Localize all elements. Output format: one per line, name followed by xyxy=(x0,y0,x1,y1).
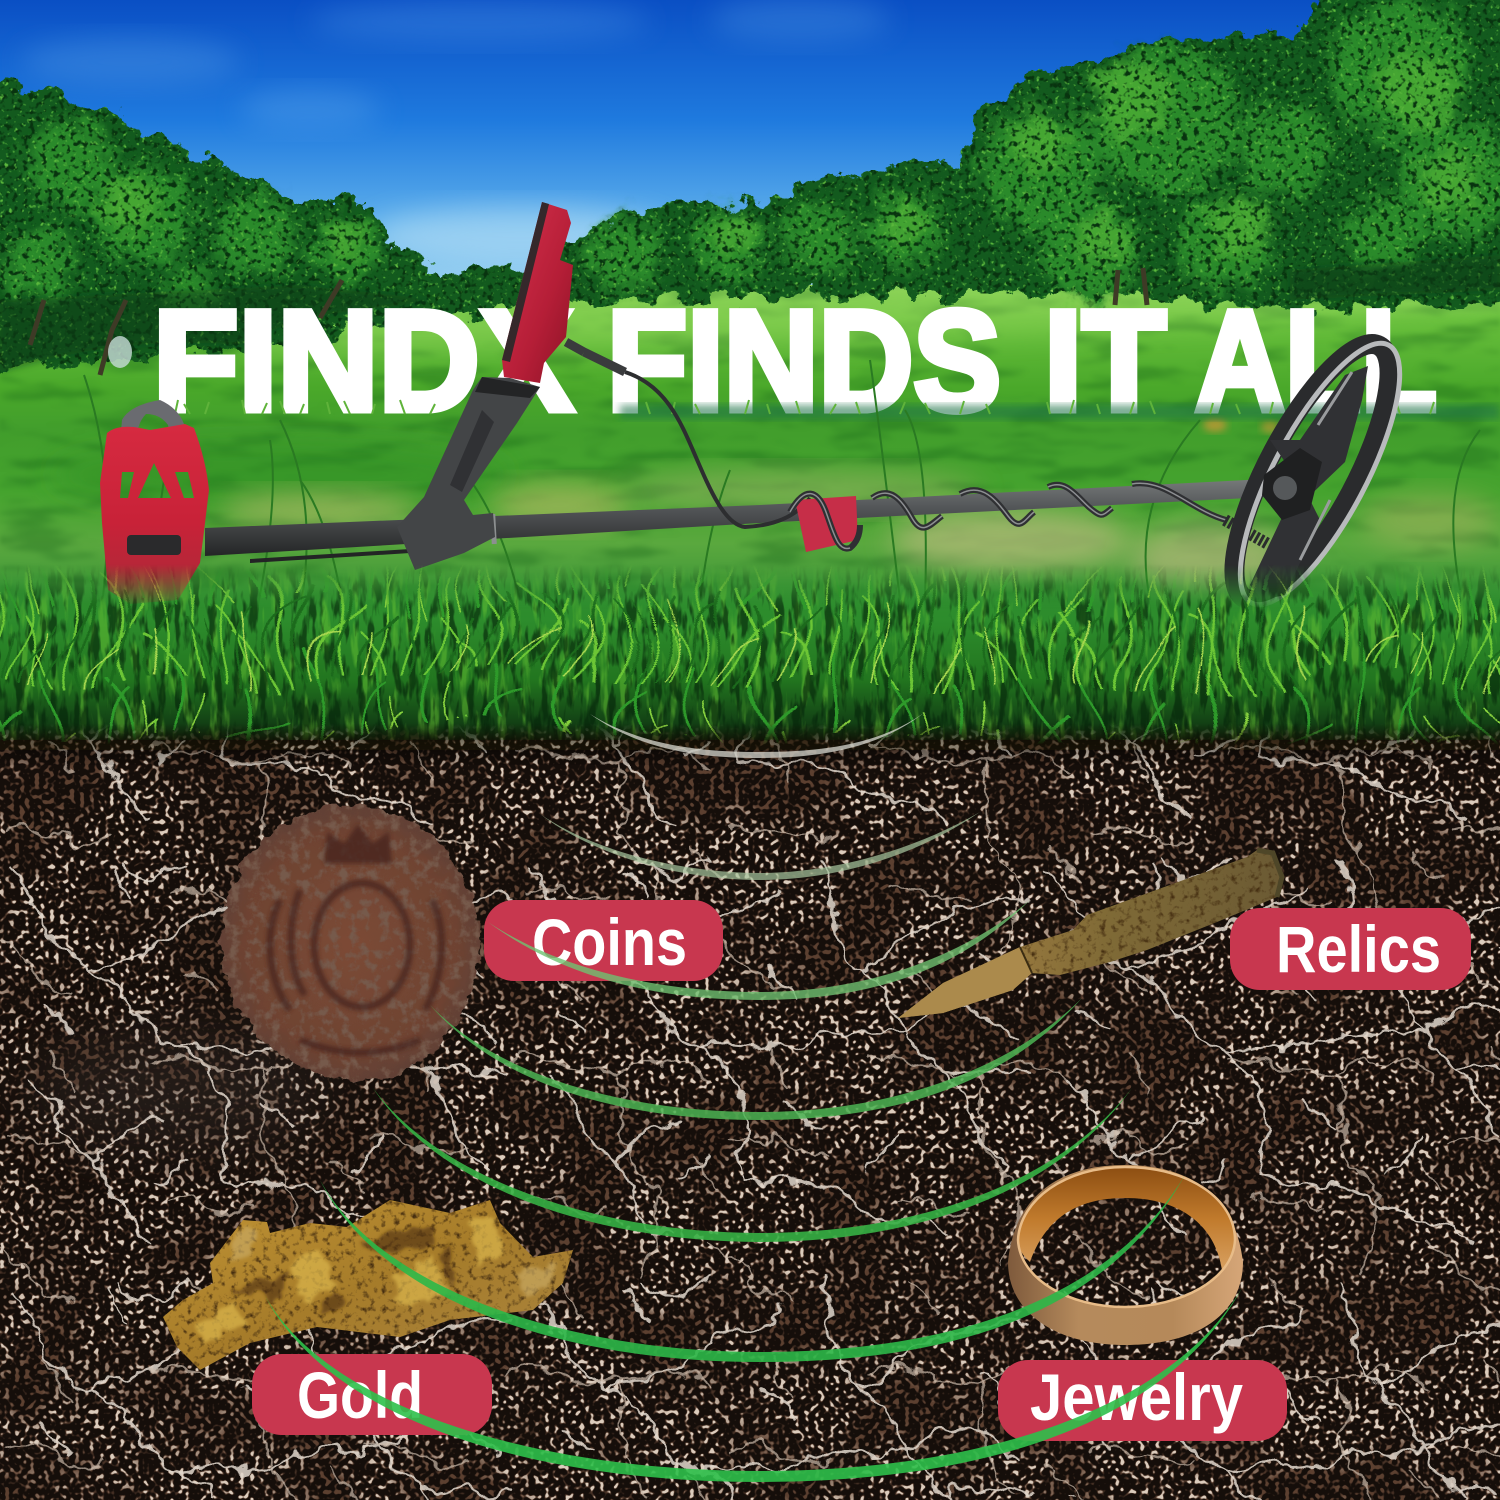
detector: cable spirals xyxy=(790,483,1226,549)
coin emblem xyxy=(270,830,442,1052)
wave 3 xyxy=(488,900,1030,1000)
detector: red cable clip xyxy=(795,496,858,552)
metal detector xyxy=(100,202,1429,625)
title: FINDX FINDS IT ALL: IT xyxy=(1044,282,1166,441)
coin xyxy=(221,806,480,1081)
labels xyxy=(252,900,1471,1441)
gold ring xyxy=(1008,1165,1243,1345)
detector: handle grip xyxy=(397,377,540,570)
soil ground with roots xyxy=(0,700,1500,1500)
foreground grass blades in field xyxy=(84,360,1480,620)
title: FINDX FINDS IT ALL: FINDX xyxy=(153,282,573,441)
wave 4 xyxy=(430,998,1082,1120)
trees: treeline xyxy=(0,0,1500,370)
trees: colour clumps xyxy=(4,0,1500,316)
detector: spring xyxy=(1225,520,1268,544)
detector: red arm cuff xyxy=(100,424,209,604)
title: FINDX FINDS IT ALL xyxy=(153,282,1437,441)
grass band at ground line xyxy=(0,566,1500,744)
label: Coins: Coins xyxy=(532,905,687,979)
wave 5 xyxy=(373,1088,1132,1242)
signal waves xyxy=(265,712,1242,1482)
bullet relic xyxy=(898,850,1282,1018)
wave 7 xyxy=(265,1288,1242,1482)
label: Gold: Gold xyxy=(297,1358,423,1432)
gold nugget xyxy=(163,1200,573,1370)
title: FINDX FINDS IT ALL: FINDS xyxy=(607,282,1001,441)
label: Gold xyxy=(252,1354,492,1435)
background: sky xyxy=(0,0,1500,300)
detector: display edge xyxy=(502,202,549,362)
detector: shaft xyxy=(205,479,1268,563)
label: Relics: Relics xyxy=(1276,912,1441,986)
tree trunks and shade xyxy=(0,255,1500,375)
grass tufts over title base xyxy=(156,400,1500,419)
detector: arm cuff slot xyxy=(127,535,181,555)
wave 1 xyxy=(590,712,925,758)
detector: cable xyxy=(566,342,625,372)
detector: red control box xyxy=(502,202,573,383)
wave 2 xyxy=(540,812,980,880)
background: lawn field xyxy=(0,250,1500,630)
label: Jewelry: Jewelry xyxy=(1030,1360,1243,1434)
title: FINDX FINDS IT ALL: ALL xyxy=(1195,282,1437,441)
detector: arm cuff strap xyxy=(120,400,184,446)
detector: search coil xyxy=(1206,323,1429,625)
wave 6 xyxy=(320,1175,1185,1362)
